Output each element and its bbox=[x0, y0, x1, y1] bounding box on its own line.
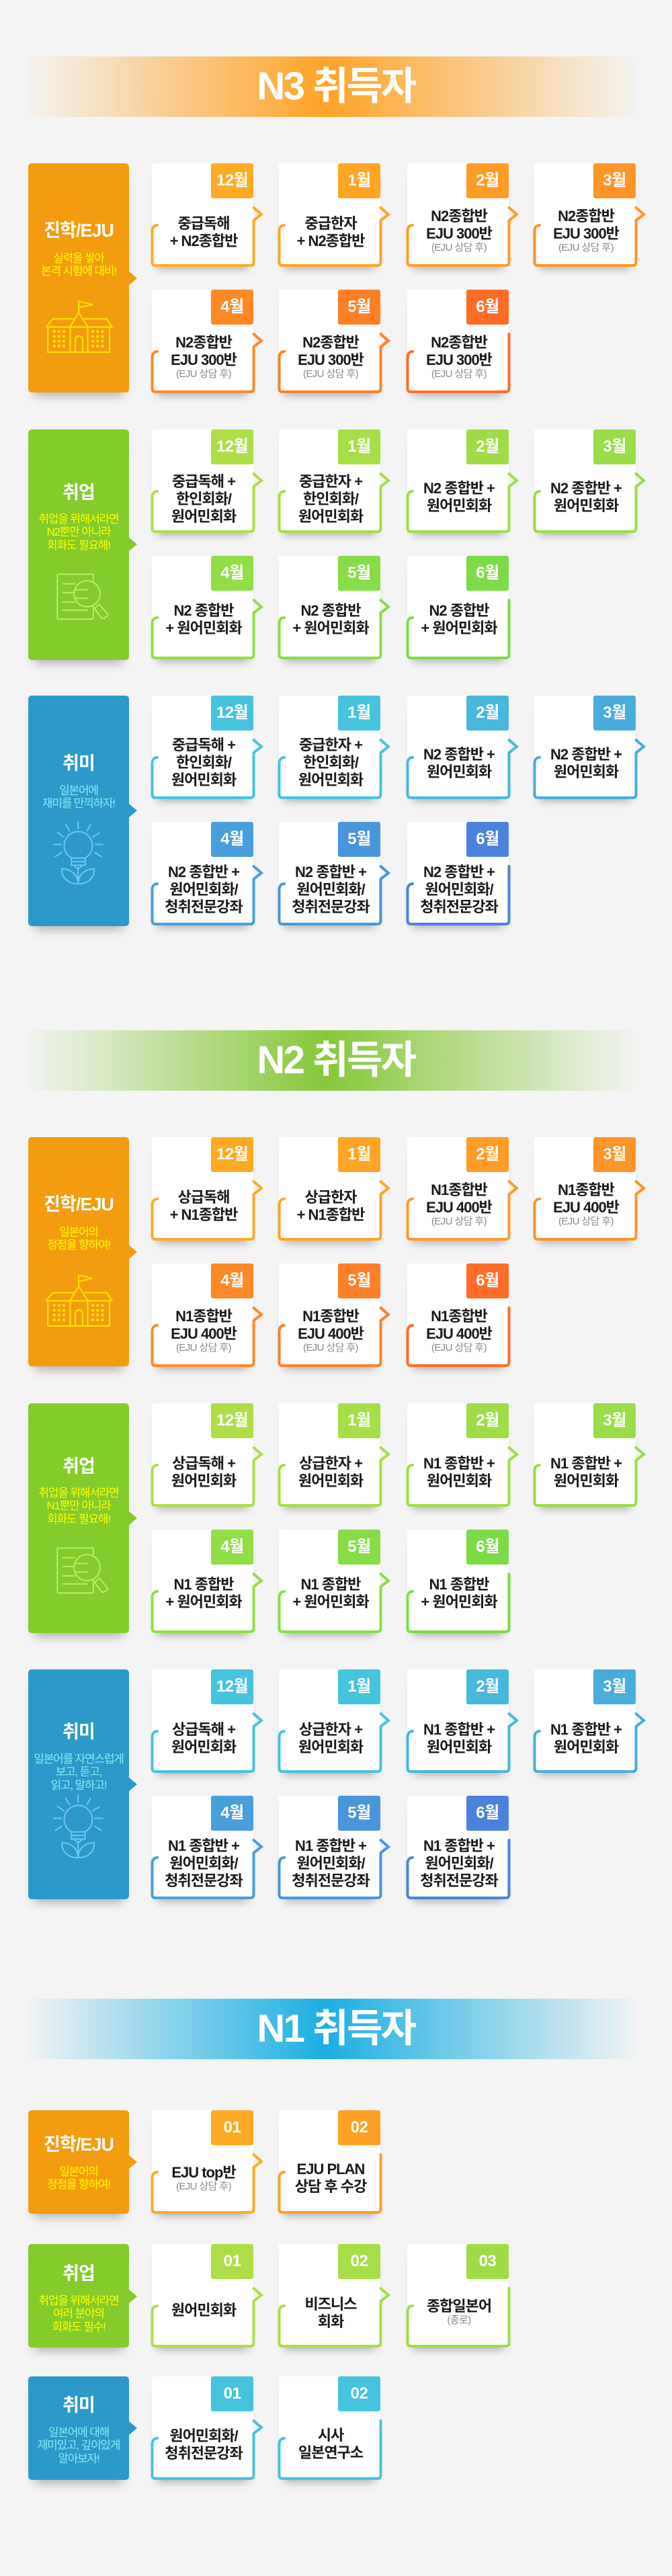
card: 12월: 12월 bbox=[216, 704, 248, 722]
banner: N2 취득자: N2 취득자 bbox=[257, 1038, 415, 1082]
panel description: 취업을 위해서라면 bbox=[38, 513, 119, 526]
card: 3월: 3월 bbox=[603, 1677, 626, 1696]
panel: 진학/EJU bbox=[28, 2110, 129, 2214]
card: 1월 bbox=[278, 1403, 382, 1507]
panel description: 회화도 필요해! bbox=[47, 1513, 110, 1526]
card: 6월: 6월 bbox=[476, 830, 499, 848]
panel description bbox=[38, 2294, 119, 2333]
card: 12월 bbox=[151, 1669, 255, 1773]
panel description bbox=[47, 2165, 110, 2191]
card: 03: 종합일본어 bbox=[427, 2298, 491, 2315]
card: 12월 bbox=[151, 1137, 255, 1241]
card: 2월: 2월 bbox=[476, 1145, 499, 1163]
card: 4월: 4월 bbox=[220, 1272, 244, 1290]
banner: N3 취득자: N3 취득자 bbox=[257, 65, 415, 108]
card: 6월: N1 종합반 + bbox=[423, 1837, 495, 1854]
panel description bbox=[38, 1487, 119, 1526]
card: 12월: 12월 bbox=[216, 1145, 248, 1163]
card: 3월: (EJU 상담 후) bbox=[558, 1216, 614, 1227]
card: 3월: 3월 bbox=[603, 438, 626, 456]
card: 02 bbox=[278, 2376, 382, 2480]
panel description: 보고, 듣고, bbox=[56, 1765, 101, 1778]
panel: 진학/EJU bbox=[28, 163, 129, 392]
card: 2월: 2월 bbox=[476, 438, 499, 456]
card: 1월: 원어민회화 bbox=[298, 772, 363, 788]
card: 12월: 12월 bbox=[216, 1677, 248, 1696]
card: 12월: 중급독해 + bbox=[172, 473, 235, 490]
section: N2 취득자 bbox=[28, 1030, 646, 1909]
card: 12월: 중급독해 + bbox=[172, 737, 235, 753]
card: 4월: 청취전문강좌 bbox=[165, 899, 243, 915]
card: 3월 bbox=[533, 163, 637, 267]
panel description: N2뿐만 아니라 bbox=[46, 526, 111, 538]
panel description bbox=[47, 1226, 110, 1251]
card: 5월: N2종합반 bbox=[302, 334, 359, 351]
card: 01: 원어민회화 bbox=[171, 2302, 236, 2319]
card: 5월: 5월 bbox=[347, 298, 371, 316]
card: 6월: 6월 bbox=[476, 1538, 499, 1556]
panel description: 재미를 만끽하자! bbox=[42, 797, 115, 810]
panel description: 본격 시험에 대비! bbox=[41, 265, 116, 278]
card: 6월: (EJU 상담 후) bbox=[431, 368, 487, 380]
panel: 진학/EJU bbox=[28, 1137, 129, 1366]
card: 6월: 청취전문강좌 bbox=[420, 1872, 498, 1889]
card: 4월 bbox=[151, 1796, 255, 1899]
card: 02: 02 bbox=[351, 2384, 368, 2403]
card: 1월: 1월 bbox=[347, 171, 371, 190]
card: 12월: 상급독해 + bbox=[172, 1455, 235, 1472]
card: 6월: N2 종합반 + bbox=[423, 864, 495, 880]
banner: N1 취득자 bbox=[29, 1999, 634, 2059]
card: 5월: (EJU 상담 후) bbox=[303, 368, 358, 380]
card: 01: 01 bbox=[224, 2252, 241, 2270]
card: 2월: N1종합반 bbox=[431, 1181, 487, 1198]
card: 4월: 4월 bbox=[220, 298, 244, 316]
card: 01: 원어민회화/ bbox=[169, 2427, 238, 2444]
card: 5월 bbox=[278, 1530, 382, 1633]
card: 02: 회화 bbox=[318, 2313, 343, 2330]
card: 01: EJU top반 bbox=[171, 2164, 236, 2181]
panel description: 회화도 필요해! bbox=[47, 539, 110, 552]
card: 02: 02 bbox=[351, 2118, 368, 2136]
card: 2월 bbox=[406, 1403, 510, 1507]
card: 3월: 원어민회화 bbox=[554, 763, 618, 780]
card: 3월: EJU 400반 bbox=[553, 1199, 619, 1216]
card: 4월: N2종합반 bbox=[175, 334, 232, 351]
card: 6월: + 원어민회화 bbox=[421, 1593, 497, 1610]
card: 6월: EJU 300반 bbox=[426, 351, 492, 368]
card: 5월 bbox=[278, 556, 382, 659]
card: 1월: 1월 bbox=[347, 704, 371, 722]
card: 01 bbox=[151, 2110, 255, 2214]
panel description: 일본어의 bbox=[59, 2165, 98, 2178]
card: 5월: 원어민회화/ bbox=[296, 1855, 365, 1872]
card: 12월: 한인회화/ bbox=[176, 754, 231, 771]
section: N1 취득자 bbox=[28, 1999, 629, 2489]
card: 03: (종로) bbox=[447, 2315, 471, 2326]
card: 4월: N1 종합반 bbox=[174, 1576, 233, 1593]
card: 01: 청취전문강좌 bbox=[165, 2445, 243, 2462]
card: 1월: 원어민회화 bbox=[298, 1472, 363, 1489]
card: 4월: N1종합반 bbox=[175, 1308, 232, 1325]
panel description: N1뿐만 아니라 bbox=[46, 1499, 111, 1512]
card: 5월: 5월 bbox=[347, 1538, 371, 1556]
card: 5월: EJU 400반 bbox=[298, 1325, 364, 1342]
card: 2월: 2월 bbox=[476, 171, 499, 190]
card: 1월: 1월 bbox=[347, 1677, 371, 1696]
card: 4월: N2 종합반 + bbox=[168, 864, 239, 880]
card: 3월: 3월 bbox=[603, 1411, 626, 1429]
card: 1월: 한인회화/ bbox=[303, 754, 358, 771]
panel title: 취미 bbox=[62, 2395, 95, 2415]
card: 2월: EJU 300반 bbox=[426, 225, 492, 242]
card: 6월: N1종합반 bbox=[431, 1308, 487, 1325]
card: 1월 bbox=[278, 1669, 382, 1773]
card: 1월: 상급한자 + bbox=[299, 1455, 362, 1472]
card: 5월: 청취전문강좌 bbox=[292, 899, 370, 915]
card: 6월 bbox=[406, 1530, 510, 1633]
card: 5월: + 원어민회화 bbox=[292, 620, 369, 636]
card: 12월 bbox=[151, 1403, 255, 1507]
card: 1월: 1월 bbox=[347, 438, 371, 456]
panel: 취미 bbox=[28, 696, 129, 926]
card: 6월: 6월 bbox=[476, 1804, 499, 1822]
card: 2월: 원어민회화 bbox=[427, 497, 491, 514]
card: 4월 bbox=[151, 1530, 255, 1633]
card: 12월: 12월 bbox=[216, 438, 248, 456]
card: 4월: + 원어민회화 bbox=[165, 620, 242, 636]
panel title: 취미 bbox=[62, 753, 95, 774]
card: 2월 bbox=[406, 696, 510, 799]
panel: 취업 bbox=[28, 429, 129, 660]
banner: N2 취득자 bbox=[29, 1030, 634, 1091]
card: 2월: N2종합반 bbox=[431, 208, 487, 224]
card: 4월: 청취전문강좌 bbox=[165, 1872, 243, 1889]
card: 3월: N2 종합반 + bbox=[550, 480, 622, 497]
card: 2월: 원어민회화 bbox=[427, 1472, 491, 1489]
panel title: 취업 bbox=[62, 2263, 95, 2284]
card: 12월: 한인회화/ bbox=[176, 491, 231, 507]
card: 4월: EJU 400반 bbox=[171, 1325, 237, 1342]
card: 5월: 원어민회화/ bbox=[296, 881, 365, 898]
card: 12월: 원어민회화 bbox=[171, 1472, 236, 1489]
card: 2월 bbox=[406, 429, 510, 533]
panel: 취업 bbox=[28, 2244, 129, 2348]
card: 12월: + N2종합반 bbox=[170, 233, 237, 249]
card: 2월 bbox=[406, 163, 510, 267]
card: 6월: N1 종합반 bbox=[429, 1576, 489, 1593]
icon: school bbox=[46, 1274, 113, 1327]
card: 01 bbox=[151, 2244, 255, 2348]
card: 1월: + N2종합반 bbox=[297, 233, 364, 249]
card: 4월: N1 종합반 + bbox=[168, 1837, 239, 1854]
card: 2월: (EJU 상담 후) bbox=[431, 242, 487, 253]
card: 1월: 중급한자 + bbox=[299, 473, 362, 490]
card: 3월: 3월 bbox=[603, 171, 626, 190]
panel description: 회화도 필수! bbox=[52, 2321, 106, 2333]
card: 01: (EJU 상담 후) bbox=[176, 2181, 231, 2192]
card: 4월: + 원어민회화 bbox=[165, 1593, 242, 1610]
card: 2월: 2월 bbox=[476, 704, 499, 722]
card: 3월 bbox=[533, 696, 637, 799]
panel description: 일본어에 bbox=[59, 784, 98, 797]
card: 2월: N1 종합반 + bbox=[423, 1455, 495, 1472]
card: 4월: 4월 bbox=[220, 1538, 244, 1556]
panel description: 취업을 위해서라면 bbox=[38, 2294, 119, 2307]
card: 6월 bbox=[406, 1796, 510, 1899]
card: 4월: 4월 bbox=[220, 564, 244, 582]
card: 1월: 한인회화/ bbox=[303, 491, 358, 507]
card: 5월: EJU 300반 bbox=[298, 351, 364, 368]
icon: light bulb plant bbox=[53, 1794, 103, 1859]
card: 3월: N1 종합반 + bbox=[550, 1721, 622, 1738]
panel: 취업 bbox=[28, 1403, 129, 1633]
card: 5월 bbox=[278, 822, 382, 925]
card: 6월: N2 종합반 bbox=[429, 602, 489, 619]
panel description: 읽고, 말하고! bbox=[51, 1779, 106, 1792]
card: 1월: 1월 bbox=[347, 1145, 371, 1163]
card: 02: EJU PLAN bbox=[297, 2161, 364, 2177]
card: 02: 상담 후 수강 bbox=[295, 2178, 366, 2195]
card: 12월: 중급독해 bbox=[178, 215, 229, 232]
panel title: 취업 bbox=[62, 483, 95, 503]
card: 3월: N1 종합반 + bbox=[550, 1455, 622, 1472]
card: 4월 bbox=[151, 556, 255, 659]
card: 2월: 2월 bbox=[476, 1677, 499, 1696]
card: 12월: 원어민회화 bbox=[171, 508, 236, 525]
card: 5월: 청취전문강좌 bbox=[292, 1872, 370, 1889]
card: 02: 02 bbox=[351, 2252, 368, 2270]
panel description: 취업을 위해서라면 bbox=[38, 1487, 119, 1499]
card: 2월: (EJU 상담 후) bbox=[431, 1216, 487, 1227]
card: 1월: 중급한자 + bbox=[299, 737, 362, 753]
banner: N3 취득자 bbox=[29, 56, 634, 117]
card: 3월 bbox=[533, 1669, 637, 1773]
card: 1월: + N1종합반 bbox=[297, 1206, 364, 1223]
card: 03 bbox=[406, 2244, 510, 2348]
card: 5월: + 원어민회화 bbox=[292, 1593, 369, 1610]
card: 6월: 청취전문강좌 bbox=[420, 899, 498, 915]
card: 6월: (EJU 상담 후) bbox=[431, 1342, 487, 1354]
card: 4월: (EJU 상담 후) bbox=[176, 368, 231, 380]
panel title: 진학/EJU bbox=[44, 220, 114, 241]
icon: document search bbox=[56, 1547, 109, 1594]
card: 12월: 12월 bbox=[216, 1411, 248, 1429]
card: 5월 bbox=[278, 1263, 382, 1367]
card: 4월: 4월 bbox=[220, 830, 244, 848]
card: 2월: N1 종합반 + bbox=[423, 1721, 495, 1738]
card: 2월: 2월 bbox=[476, 1411, 499, 1429]
card: 3월 bbox=[533, 1403, 637, 1507]
panel: 취미 bbox=[28, 2376, 129, 2480]
card: 01: 01 bbox=[224, 2384, 241, 2403]
panel description: 일본어에 대해 bbox=[48, 2426, 109, 2439]
card: 6월 bbox=[406, 290, 510, 393]
card: 1월: 원어민회화 bbox=[298, 508, 363, 525]
card: 3월: 원어민회화 bbox=[554, 1739, 618, 1755]
panel description: 여러 분야의 bbox=[53, 2307, 104, 2320]
panel description bbox=[38, 2426, 120, 2465]
card: 12월 bbox=[151, 696, 255, 799]
card: 12월: 원어민회화 bbox=[171, 772, 236, 788]
card: 3월: N1종합반 bbox=[558, 1181, 614, 1198]
card: 5월: (EJU 상담 후) bbox=[303, 1342, 358, 1354]
icon: light bulb plant bbox=[53, 821, 103, 884]
panel description: 정점을 향하여! bbox=[47, 1239, 110, 1251]
card: 5월: 5월 bbox=[347, 1272, 371, 1290]
panel description bbox=[38, 513, 119, 552]
card: 1월 bbox=[278, 429, 382, 533]
panel description bbox=[41, 252, 116, 278]
card: 3월: 3월 bbox=[603, 1145, 626, 1163]
card: 2월: 원어민회화 bbox=[427, 1739, 491, 1755]
card: 1월: 중급한자 bbox=[305, 215, 356, 232]
card: 1월: 상급한자 + bbox=[299, 1721, 362, 1738]
card: 02: 일본연구소 bbox=[298, 2444, 363, 2461]
panel description bbox=[42, 784, 115, 810]
card: 6월 bbox=[406, 556, 510, 659]
card: 6월: N2종합반 bbox=[431, 334, 487, 351]
card: 3월: N2종합반 bbox=[558, 208, 614, 224]
card: 12월 bbox=[151, 429, 255, 533]
panel description: 재미있고, 깊이있게 bbox=[38, 2439, 120, 2452]
card: 3월: (EJU 상담 후) bbox=[558, 242, 614, 253]
card: 6월: 원어민회화/ bbox=[425, 881, 493, 898]
panel: 취미 bbox=[28, 1669, 129, 1899]
card: 1월: 원어민회화 bbox=[298, 1739, 363, 1755]
card: 2월: EJU 400반 bbox=[426, 1199, 492, 1216]
card: 3월: 3월 bbox=[603, 704, 626, 722]
panel description: 정점을 향하여! bbox=[47, 2178, 110, 2191]
card: 12월: 상급독해 + bbox=[172, 1721, 235, 1738]
card: 4월 bbox=[151, 1263, 255, 1367]
panel description: 일본어의 bbox=[59, 1226, 98, 1239]
icon: school bbox=[46, 300, 113, 353]
card: 12월: + N1종합반 bbox=[170, 1206, 237, 1223]
card: 6월: 6월 bbox=[476, 298, 499, 316]
card: 02 bbox=[278, 2110, 382, 2214]
icon: document search bbox=[56, 573, 109, 620]
card: 1월 bbox=[278, 1137, 382, 1241]
card: 6월: 6월 bbox=[476, 1272, 499, 1290]
panel title: 취업 bbox=[62, 1456, 95, 1477]
card: 3월 bbox=[533, 1137, 637, 1241]
card: 5월: N2 종합반 bbox=[301, 602, 360, 619]
card: 4월: 4월 bbox=[220, 1804, 244, 1822]
card: 2월 bbox=[406, 1669, 510, 1773]
card: 1월 bbox=[278, 696, 382, 799]
panel description: 알아보자! bbox=[58, 2452, 99, 2465]
panel title: 진학/EJU bbox=[44, 1194, 114, 1214]
card: 01 bbox=[151, 2376, 255, 2480]
card: 01: 01 bbox=[224, 2118, 241, 2136]
card: 6월 bbox=[406, 1263, 510, 1367]
card: 12월: 상급독해 bbox=[178, 1189, 229, 1206]
card: 3월 bbox=[533, 429, 637, 533]
card: 5월 bbox=[278, 290, 382, 393]
card: 1월: 상급한자 bbox=[305, 1189, 356, 1206]
card: 1월: 1월 bbox=[347, 1411, 371, 1429]
card: 4월: (EJU 상담 후) bbox=[176, 1342, 231, 1354]
card: 02: 시사 bbox=[318, 2427, 343, 2444]
card: 02: 비즈니스 bbox=[305, 2296, 356, 2313]
panel description: 실력을 쌓아 bbox=[53, 252, 104, 265]
card: 4월 bbox=[151, 822, 255, 925]
card: 2월: 원어민회화 bbox=[427, 763, 491, 780]
card: 12월 bbox=[151, 163, 255, 267]
card: 5월 bbox=[278, 1796, 382, 1899]
section: N3 취득자 bbox=[28, 56, 646, 936]
card: 4월: 원어민회화/ bbox=[169, 1855, 238, 1872]
card: 2월: N2 종합반 + bbox=[423, 480, 495, 497]
card: 6월 bbox=[406, 822, 510, 925]
card: 2월: N2 종합반 + bbox=[423, 746, 495, 763]
card: 3월: 원어민회화 bbox=[554, 1472, 618, 1489]
card: 03: 03 bbox=[479, 2252, 496, 2270]
panel title: 취미 bbox=[62, 1722, 95, 1742]
card: 5월: N1 종합반 bbox=[301, 1576, 360, 1593]
card: 3월: EJU 300반 bbox=[553, 225, 619, 242]
card: 3월: N2 종합반 + bbox=[550, 746, 622, 763]
card: 5월: 5월 bbox=[347, 1804, 371, 1822]
card: 4월: 원어민회화/ bbox=[169, 881, 238, 898]
card: 5월: N1 종합반 + bbox=[295, 1837, 366, 1854]
card: 6월: EJU 400반 bbox=[426, 1325, 492, 1342]
card: 5월: 5월 bbox=[347, 830, 371, 848]
card: 12월: 원어민회화 bbox=[171, 1739, 236, 1755]
card: 5월: N1종합반 bbox=[302, 1308, 359, 1325]
card: 6월: 원어민회화/ bbox=[425, 1855, 493, 1872]
card: 6월: + 원어민회화 bbox=[421, 620, 497, 636]
card: 02 bbox=[278, 2244, 382, 2348]
card: 5월: 5월 bbox=[347, 564, 371, 582]
panel title: 진학/EJU bbox=[44, 2134, 114, 2155]
card: 4월 bbox=[151, 290, 255, 393]
card: 12월: 12월 bbox=[216, 171, 248, 190]
card: 4월: EJU 300반 bbox=[171, 351, 237, 368]
card: 3월: 원어민회화 bbox=[554, 497, 618, 514]
card: 5월: N2 종합반 + bbox=[295, 864, 366, 880]
banner: N1 취득자: N1 취득자 bbox=[257, 2007, 415, 2050]
card: 1월 bbox=[278, 163, 382, 267]
card: 2월 bbox=[406, 1137, 510, 1241]
card: 6월: 6월 bbox=[476, 564, 499, 582]
card: 4월: N2 종합반 bbox=[174, 602, 233, 619]
panel description: 일본어를 자연스럽게 bbox=[34, 1753, 124, 1765]
panel description bbox=[34, 1753, 124, 1792]
